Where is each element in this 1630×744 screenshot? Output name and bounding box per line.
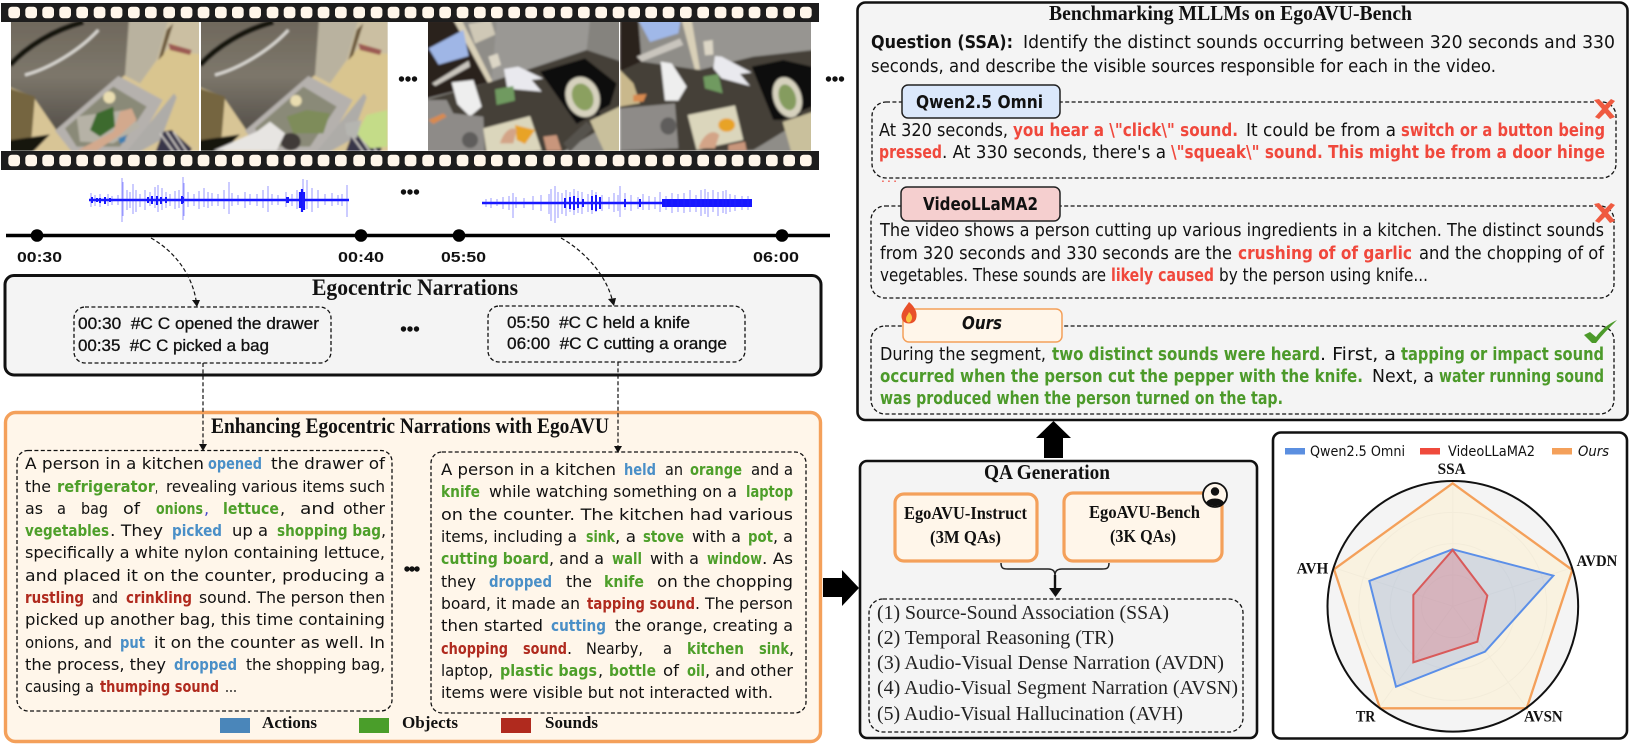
text block: second enhanced narration: . The person bbox=[695, 594, 793, 613]
text block: second enhanced narration: . As bbox=[762, 549, 793, 568]
text block: second enhanced narration: items, including a bbox=[441, 527, 577, 546]
series: Ours bbox=[1334, 483, 1572, 708]
timestamp labels: 00:30 bbox=[17, 250, 62, 266]
text block: first enhanced narration: the drawer of bbox=[271, 454, 385, 473]
question: Identify the distinct sounds occurring between 320 seconds and 330 bbox=[1023, 32, 1615, 53]
arrow: second timestamp to narration bbox=[561, 238, 616, 306]
text block: first enhanced narration: bag bbox=[81, 499, 108, 518]
answer: Qwen2.5 Omni: At 320 seconds, bbox=[879, 120, 1008, 141]
text block: first enhanced narration: onions, and bbox=[25, 633, 112, 652]
text block: first enhanced narration: and bbox=[92, 588, 118, 607]
ellipsis after frames: ••• bbox=[825, 69, 845, 91]
text block: second enhanced narration: on the chopping bbox=[657, 572, 793, 591]
text block: first enhanced narration: , bbox=[155, 477, 158, 496]
text block: first enhanced narration: , bbox=[280, 499, 285, 518]
text block: second enhanced narration: window bbox=[707, 549, 762, 568]
text block: first enhanced narration: revealing various items such bbox=[166, 477, 385, 496]
ellipsis between frames: ••• bbox=[398, 69, 418, 91]
text block: second enhanced narration: laptop, bbox=[441, 661, 493, 680]
answer: Ours: was produced when the person turned on the tap. bbox=[880, 388, 1283, 409]
axis labels: SSA bbox=[1438, 461, 1466, 478]
series: Qwen2.5 Omni bbox=[1369, 549, 1553, 687]
text block: first enhanced narration: as bbox=[25, 499, 43, 518]
model badge: Qwen2.5 Omni: Qwen2.5 Omni bbox=[916, 92, 1043, 113]
task list bbox=[869, 599, 1243, 732]
text block: second enhanced narration: A person in a kitchen bbox=[441, 460, 616, 479]
text block: first enhanced narration: . They bbox=[110, 521, 163, 540]
text block: first enhanced narration: rustling bbox=[25, 588, 84, 607]
task list: (3) Audio-Visual Dense Narration (AVDN) bbox=[877, 653, 1224, 674]
answer: Qwen2.5 Omni: It could be from a bbox=[1246, 120, 1396, 141]
frame: refrigerator drawer, reaching hand bbox=[11, 22, 199, 151]
text block: second enhanced narration: cutting board bbox=[441, 549, 549, 568]
box: EgoAVU-Instruct: (3M QAs) bbox=[930, 527, 1001, 547]
answer: Ours: occurred when the person cut the pepper with the knife. bbox=[880, 366, 1363, 387]
text block: first enhanced narration: specifically a white nylon containing lettuce, bbox=[25, 543, 385, 562]
text block: first enhanced narration: , bbox=[381, 521, 386, 540]
narration box: second clip: 05:50 #C C held a knife bbox=[507, 314, 690, 332]
panel: QA generation bbox=[860, 460, 1257, 738]
audio waveform two bbox=[482, 186, 752, 223]
model badge: VideoLLaMA2: VideoLLaMA2 bbox=[923, 194, 1038, 215]
text block: second enhanced narration: sink bbox=[586, 527, 615, 546]
text block: second enhanced narration: chopping bbox=[441, 639, 508, 658]
text block: second enhanced narration: held bbox=[624, 460, 656, 479]
text block: second enhanced narration: Nearby, bbox=[586, 639, 643, 658]
text block: first enhanced narration: the process, they bbox=[25, 655, 166, 674]
text block: first enhanced narration bbox=[17, 450, 392, 711]
frame: kitchen counter, chopping close-up bbox=[620, 20, 813, 153]
text block: second enhanced narration: orange bbox=[690, 460, 742, 479]
arrow: enhanced narrations to QA generation bbox=[823, 570, 859, 606]
arrow: first narration to enhanced bbox=[199, 363, 207, 451]
text block: second enhanced narration: , bbox=[598, 661, 603, 680]
icon: flame bbox=[902, 302, 917, 324]
timeline bbox=[6, 229, 830, 266]
legend: text categories: Objects bbox=[402, 713, 458, 732]
text block: first enhanced narration: other bbox=[343, 499, 385, 518]
ellipsis between narrations: ••• bbox=[400, 319, 420, 341]
ellipsis between text blocks: ••• bbox=[404, 559, 420, 581]
text block: first enhanced narration: shopping bag bbox=[277, 521, 381, 540]
legend: text categories: Sounds bbox=[545, 713, 598, 732]
text block: first enhanced narration: refrigerator bbox=[57, 477, 155, 496]
radar plot bbox=[1297, 461, 1617, 732]
text block: second enhanced narration: tapping sound bbox=[587, 594, 695, 613]
text block: second enhanced narration: stove bbox=[643, 527, 684, 546]
box: EgoAVU-Bench: (3K QAs) bbox=[1110, 526, 1176, 546]
heading: enhancing narrations: Enhancing Egocentric Narrations with EgoAVU bbox=[211, 413, 609, 438]
answer: VideoLLaMA2: and the chopping of of bbox=[1419, 243, 1605, 264]
frame: kitchen counter, cutting orange bbox=[428, 22, 619, 151]
text block: second enhanced narration: a bbox=[663, 639, 672, 658]
answer: Qwen2.5 Omni: pressed bbox=[879, 142, 942, 163]
answer: Qwen2.5 Omni: . At 330 seconds, there's a bbox=[942, 142, 1166, 163]
text block: second enhanced narration: oil bbox=[687, 661, 705, 680]
legend: text categories bbox=[220, 713, 598, 733]
answer: Ours: During the segment, bbox=[880, 344, 1046, 365]
answer: VideoLLaMA2: vegetables. These sounds are bbox=[880, 265, 1106, 286]
narration box: first clip: 00:30 #C C opened the drawer bbox=[78, 315, 320, 333]
audio waveform one bbox=[89, 177, 349, 222]
text block: second enhanced narration: , bbox=[789, 639, 794, 658]
panel: radar chart bbox=[1273, 432, 1627, 738]
text block: second enhanced narration: knife bbox=[441, 482, 480, 501]
text block: second enhanced narration: wall bbox=[612, 549, 642, 568]
timestamp labels: 05:50 bbox=[441, 250, 486, 266]
timestamp labels: 06:00 bbox=[753, 250, 799, 266]
text block: second enhanced narration: the orange, creating a bbox=[615, 616, 793, 635]
icon: wrong cross bbox=[1594, 99, 1615, 119]
text block: first enhanced narration: vegetables bbox=[25, 521, 109, 540]
answer: Ours: Next, a bbox=[1372, 366, 1434, 387]
legend: models: VideoLLaMA2 bbox=[1448, 444, 1535, 460]
text block: second enhanced narration: bottle bbox=[609, 661, 656, 680]
answer: VideoLLaMA2 bbox=[871, 187, 1615, 298]
text block: first enhanced narration: a bbox=[57, 499, 66, 518]
arrow: brace merging QA sets into task list bbox=[1001, 563, 1109, 597]
truncated ellipsis: ... bbox=[881, 169, 897, 185]
answer: Qwen2.5 Omni bbox=[872, 85, 1616, 185]
text block: second enhanced narration: on the counter. The kitchen had various bbox=[441, 505, 793, 524]
narration box: second clip: 06:00 #C C cutting a orange bbox=[507, 335, 727, 353]
narration box: first clip bbox=[74, 307, 331, 363]
answer: Qwen2.5 Omni: you hear a \"click\" sound. bbox=[1013, 120, 1238, 141]
question bbox=[871, 32, 1615, 77]
text block: second enhanced narration: , a bbox=[615, 527, 636, 546]
text block: first enhanced narration: onions bbox=[156, 499, 203, 518]
text block: second enhanced narration: , and other bbox=[705, 661, 793, 680]
text block: first enhanced narration: and placed it on the counter, producing a bbox=[25, 566, 385, 585]
icon: correct check bbox=[1584, 320, 1617, 343]
task list: (2) Temporal Reasoning (TR) bbox=[877, 628, 1114, 649]
text block: second enhanced narration: while watching something on a bbox=[489, 482, 737, 501]
text block: second enhanced narration: sink bbox=[759, 639, 789, 658]
answer: VideoLLaMA2: likely caused bbox=[1111, 265, 1214, 286]
text block: first enhanced narration: thumping sound bbox=[100, 677, 219, 696]
text block: second enhanced narration: plastic bags bbox=[500, 661, 597, 680]
text block: first enhanced narration: and bbox=[300, 499, 335, 518]
narration box: second clip bbox=[488, 306, 745, 362]
series: VideoLLaMA2 bbox=[1413, 550, 1487, 662]
text block: first enhanced narration: it on the counter as well. In bbox=[154, 633, 385, 652]
task list: (1) Source-Sound Association (SSA) bbox=[877, 603, 1169, 624]
text block: second enhanced narration: the bbox=[566, 572, 592, 591]
text block: second enhanced narration: , a bbox=[773, 527, 793, 546]
text block: second enhanced narration: sound bbox=[523, 639, 567, 658]
text block: second enhanced narration: an bbox=[665, 460, 683, 479]
text block: first enhanced narration: causing a bbox=[25, 677, 94, 696]
text block: first enhanced narration: dropped bbox=[174, 655, 237, 674]
task list: (4) Audio-Visual Segment Narration (AVSN) bbox=[877, 678, 1238, 699]
text block: second enhanced narration: . bbox=[567, 639, 572, 658]
question: seconds, and describe the visible sources responsible for each in the video. bbox=[871, 56, 1496, 77]
text block: first enhanced narration: put bbox=[120, 633, 145, 652]
legend: text categories: Actions bbox=[262, 713, 317, 732]
film strip with video frames bbox=[0, 3, 845, 170]
text block: first enhanced narration: of bbox=[123, 499, 140, 518]
text block: second enhanced narration: with a bbox=[692, 527, 741, 546]
task list: (5) Audio-Visual Hallucination (AVH) bbox=[877, 704, 1183, 725]
answer: Ours: two distinct sounds were heard bbox=[1052, 344, 1320, 365]
text block: second enhanced narration: dropped bbox=[489, 572, 552, 591]
text block: second enhanced narration: with a bbox=[650, 549, 699, 568]
box: EgoAVU-Instruct: EgoAVU-Instruct bbox=[904, 503, 1027, 523]
text block: first enhanced narration: ... bbox=[225, 677, 237, 696]
text block: second enhanced narration: pot bbox=[748, 527, 773, 546]
axis labels: AVSN bbox=[1524, 709, 1563, 726]
text block: second enhanced narration: cutting bbox=[551, 616, 606, 635]
text block: second enhanced narration: , and a bbox=[549, 549, 604, 568]
frame: refrigerator drawer, lifting lettuce bbox=[201, 22, 388, 151]
text block: second enhanced narration: they bbox=[441, 572, 476, 591]
text block: first enhanced narration: opened bbox=[208, 454, 262, 473]
axis labels: TR bbox=[1356, 709, 1376, 726]
arrow: QA generation to benchmark bbox=[1036, 421, 1071, 458]
text block: second enhanced narration: kitchen bbox=[687, 639, 744, 658]
answer: VideoLLaMA2: crushing of of garlic bbox=[1238, 243, 1412, 264]
heading: egocentric narrations: Egocentric Narrations bbox=[312, 275, 518, 300]
arrow: second narration to enhanced bbox=[614, 362, 622, 453]
timestamp labels bbox=[17, 250, 799, 266]
legend: models: Ours bbox=[1578, 444, 1609, 460]
text block: first enhanced narration: up a bbox=[232, 521, 268, 540]
panel: egocentric narrations bbox=[5, 275, 821, 375]
text block: first enhanced narration: the shopping bag, bbox=[246, 655, 385, 674]
axis labels: AVDN bbox=[1577, 553, 1617, 570]
icon: wrong cross bbox=[1594, 203, 1615, 223]
legend: models: Qwen2.5 Omni bbox=[1310, 444, 1405, 460]
answer: VideoLLaMA2: by the person using knife... bbox=[1219, 265, 1428, 286]
answer: Ours: . First, a bbox=[1320, 344, 1396, 365]
legend: models bbox=[1285, 444, 1609, 460]
icon: human annotator bbox=[1203, 483, 1227, 507]
box: EgoAVU-Bench bbox=[1064, 483, 1227, 561]
panel: enhancing egocentric narrations bbox=[6, 412, 820, 742]
axis labels: AVH bbox=[1297, 560, 1328, 577]
model badge: Ours: Ours bbox=[962, 313, 1002, 334]
text block: first enhanced narration: the bbox=[25, 477, 51, 496]
box: EgoAVU-Instruct bbox=[895, 494, 1037, 561]
text block: first enhanced narration: sound. The person then bbox=[199, 588, 385, 607]
text block: second enhanced narration: laptop bbox=[746, 482, 793, 501]
model badge: Ours bbox=[903, 309, 1062, 342]
model badge: Qwen2.5 Omni bbox=[902, 85, 1060, 118]
text block: second enhanced narration: of bbox=[663, 661, 679, 680]
text block: first enhanced narration: crinkling bbox=[126, 588, 192, 607]
timestamp labels: 00:40 bbox=[338, 250, 384, 266]
heading: benchmarking: Benchmarking MLLMs on EgoAVU-Bench bbox=[1049, 1, 1412, 25]
answer: Ours bbox=[871, 302, 1617, 414]
text block: second enhanced narration: and a bbox=[751, 460, 793, 479]
text block: first enhanced narration: lettuce bbox=[223, 499, 279, 518]
box: EgoAVU-Bench: EgoAVU-Bench bbox=[1089, 502, 1200, 522]
text block: second enhanced narration bbox=[431, 452, 806, 713]
text block: second enhanced narration: items were visible but not interacted with. bbox=[441, 683, 773, 702]
answer: VideoLLaMA2: from 320 seconds and 330 seconds are the bbox=[880, 243, 1232, 264]
axis labels bbox=[1297, 461, 1617, 726]
text block: first enhanced narration: A person in a kitchen bbox=[25, 454, 204, 473]
text block: second enhanced narration: board, it made an bbox=[441, 594, 580, 613]
text block: first enhanced narration: , bbox=[204, 499, 209, 518]
text block: second enhanced narration: knife bbox=[604, 572, 644, 591]
heading: QA generation: QA Generation bbox=[984, 460, 1110, 484]
text block: second enhanced narration: then started bbox=[441, 616, 543, 635]
text block: first enhanced narration: picked up another bag, this time containing bbox=[25, 610, 385, 629]
model badge: VideoLLaMA2 bbox=[901, 187, 1060, 221]
panel: benchmarking MLLMs bbox=[858, 1, 1628, 420]
ellipsis between waveforms: ••• bbox=[400, 182, 420, 204]
narration box: first clip: 00:35 #C C picked a bag bbox=[78, 337, 269, 355]
arrow: first timestamp to narration bbox=[151, 238, 200, 307]
question: Question (SSA): bbox=[871, 32, 1013, 53]
text block: first enhanced narration: picked bbox=[172, 521, 222, 540]
